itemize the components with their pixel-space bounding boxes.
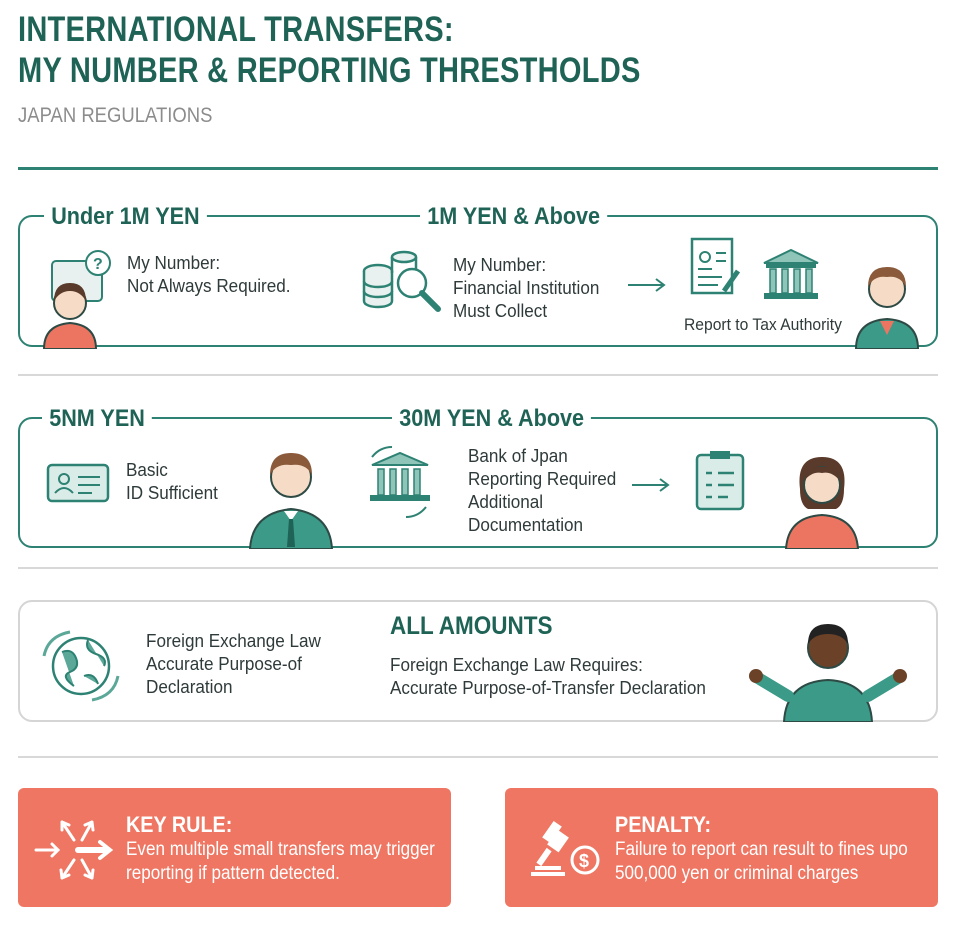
- panel: key rule: [18, 788, 451, 907]
- heading: all amounts: ALL AMOUNTS: [390, 612, 552, 640]
- text: financial institution: My Number:: [453, 255, 546, 275]
- panel: penalty: [505, 788, 938, 907]
- title: INTERNATIONAL TRANSFERS:: [18, 10, 454, 49]
- icon: man teal: [855, 267, 919, 349]
- icon: woman coral: [785, 457, 859, 549]
- arrow: [632, 478, 670, 492]
- icon: person with question: ?: [93, 256, 103, 273]
- icon: coins magnifier: [362, 250, 441, 312]
- panel: 1M yen: [18, 215, 938, 347]
- heading: 1M above: 1M YEN & Above: [427, 203, 600, 230]
- heading: penalty: PENALTY:: [615, 812, 711, 837]
- text: bank of japan: Bank of Jpan: [468, 446, 568, 466]
- text: foreign exchange law: Accurate Purpose-of: [146, 654, 302, 674]
- text: financial institution: Financial Institution: [453, 278, 599, 298]
- heading: 5NM yen: 5NM YEN: [49, 405, 145, 432]
- text: not always required: [127, 253, 290, 296]
- text: report to tax: Report to Tax Authority: [684, 315, 842, 334]
- title: [18, 10, 641, 90]
- text: foreign exchange law: Foreign Exchange Law: [146, 631, 321, 651]
- text: requires: Foreign Exchange Law Requires:: [390, 655, 643, 675]
- title: MY NUMBER & REPORTING THRESTHOLDS: [18, 51, 641, 90]
- text: bank of japan: Reporting Required: [468, 469, 616, 489]
- text: requires: [390, 655, 706, 698]
- icon: arrows outward: [34, 820, 114, 880]
- text: key rule body: [126, 839, 435, 884]
- icon: bank cycle: [370, 446, 430, 518]
- text: financial institution: Must Collect: [453, 301, 547, 321]
- text: penalty body: 500,000 yen or criminal charges: [615, 863, 858, 884]
- subtitle: JAPAN REGULATIONS: [18, 104, 212, 127]
- heading: key rule: KEY RULE:: [126, 812, 232, 837]
- icon: globe: [42, 630, 120, 702]
- icon: man shrugging: [749, 624, 907, 722]
- icon: gavel with coin: [531, 821, 600, 876]
- text: basic id: [126, 460, 218, 503]
- heading: 30M above: 30M YEN & Above: [399, 405, 584, 432]
- heading: under 1M: Under 1M YEN: [51, 203, 200, 230]
- icon: clipboard: [696, 451, 744, 510]
- panel: all amounts: [18, 600, 938, 722]
- icon: document: [690, 238, 740, 294]
- text: bank of japan: [468, 446, 616, 535]
- text: penalty body: Failure to report can result to fines upo: [615, 839, 908, 860]
- text: bank of japan: Additional: [468, 492, 543, 512]
- text: basic id: ID Sufficient: [126, 483, 218, 503]
- icon: person with question: [43, 250, 111, 349]
- text: requires: Accurate Purpose-of-Transfer Declaration: [390, 678, 706, 698]
- panel: 30M yen: [18, 417, 938, 548]
- text: bank of japan: Documentation: [468, 515, 583, 535]
- text: penalty body: [615, 839, 908, 884]
- icon: bank: [764, 248, 818, 299]
- text: foreign exchange law: [146, 631, 321, 697]
- text: key rule body: Even multiple small transfers may trigger: [126, 839, 435, 860]
- icon: gavel with coin: $: [579, 851, 589, 871]
- text: financial institution: [453, 255, 599, 321]
- text: not always required: Not Always Required.: [127, 276, 290, 296]
- text: not always required: My Number:: [127, 253, 220, 273]
- icon: businessman: [249, 453, 333, 549]
- icon: id card: [46, 464, 110, 502]
- text: key rule body: reporting if pattern detected.: [126, 863, 340, 884]
- text: basic id: Basic: [126, 460, 168, 480]
- text: foreign exchange law: Declaration: [146, 677, 232, 697]
- arrow: [628, 278, 666, 292]
